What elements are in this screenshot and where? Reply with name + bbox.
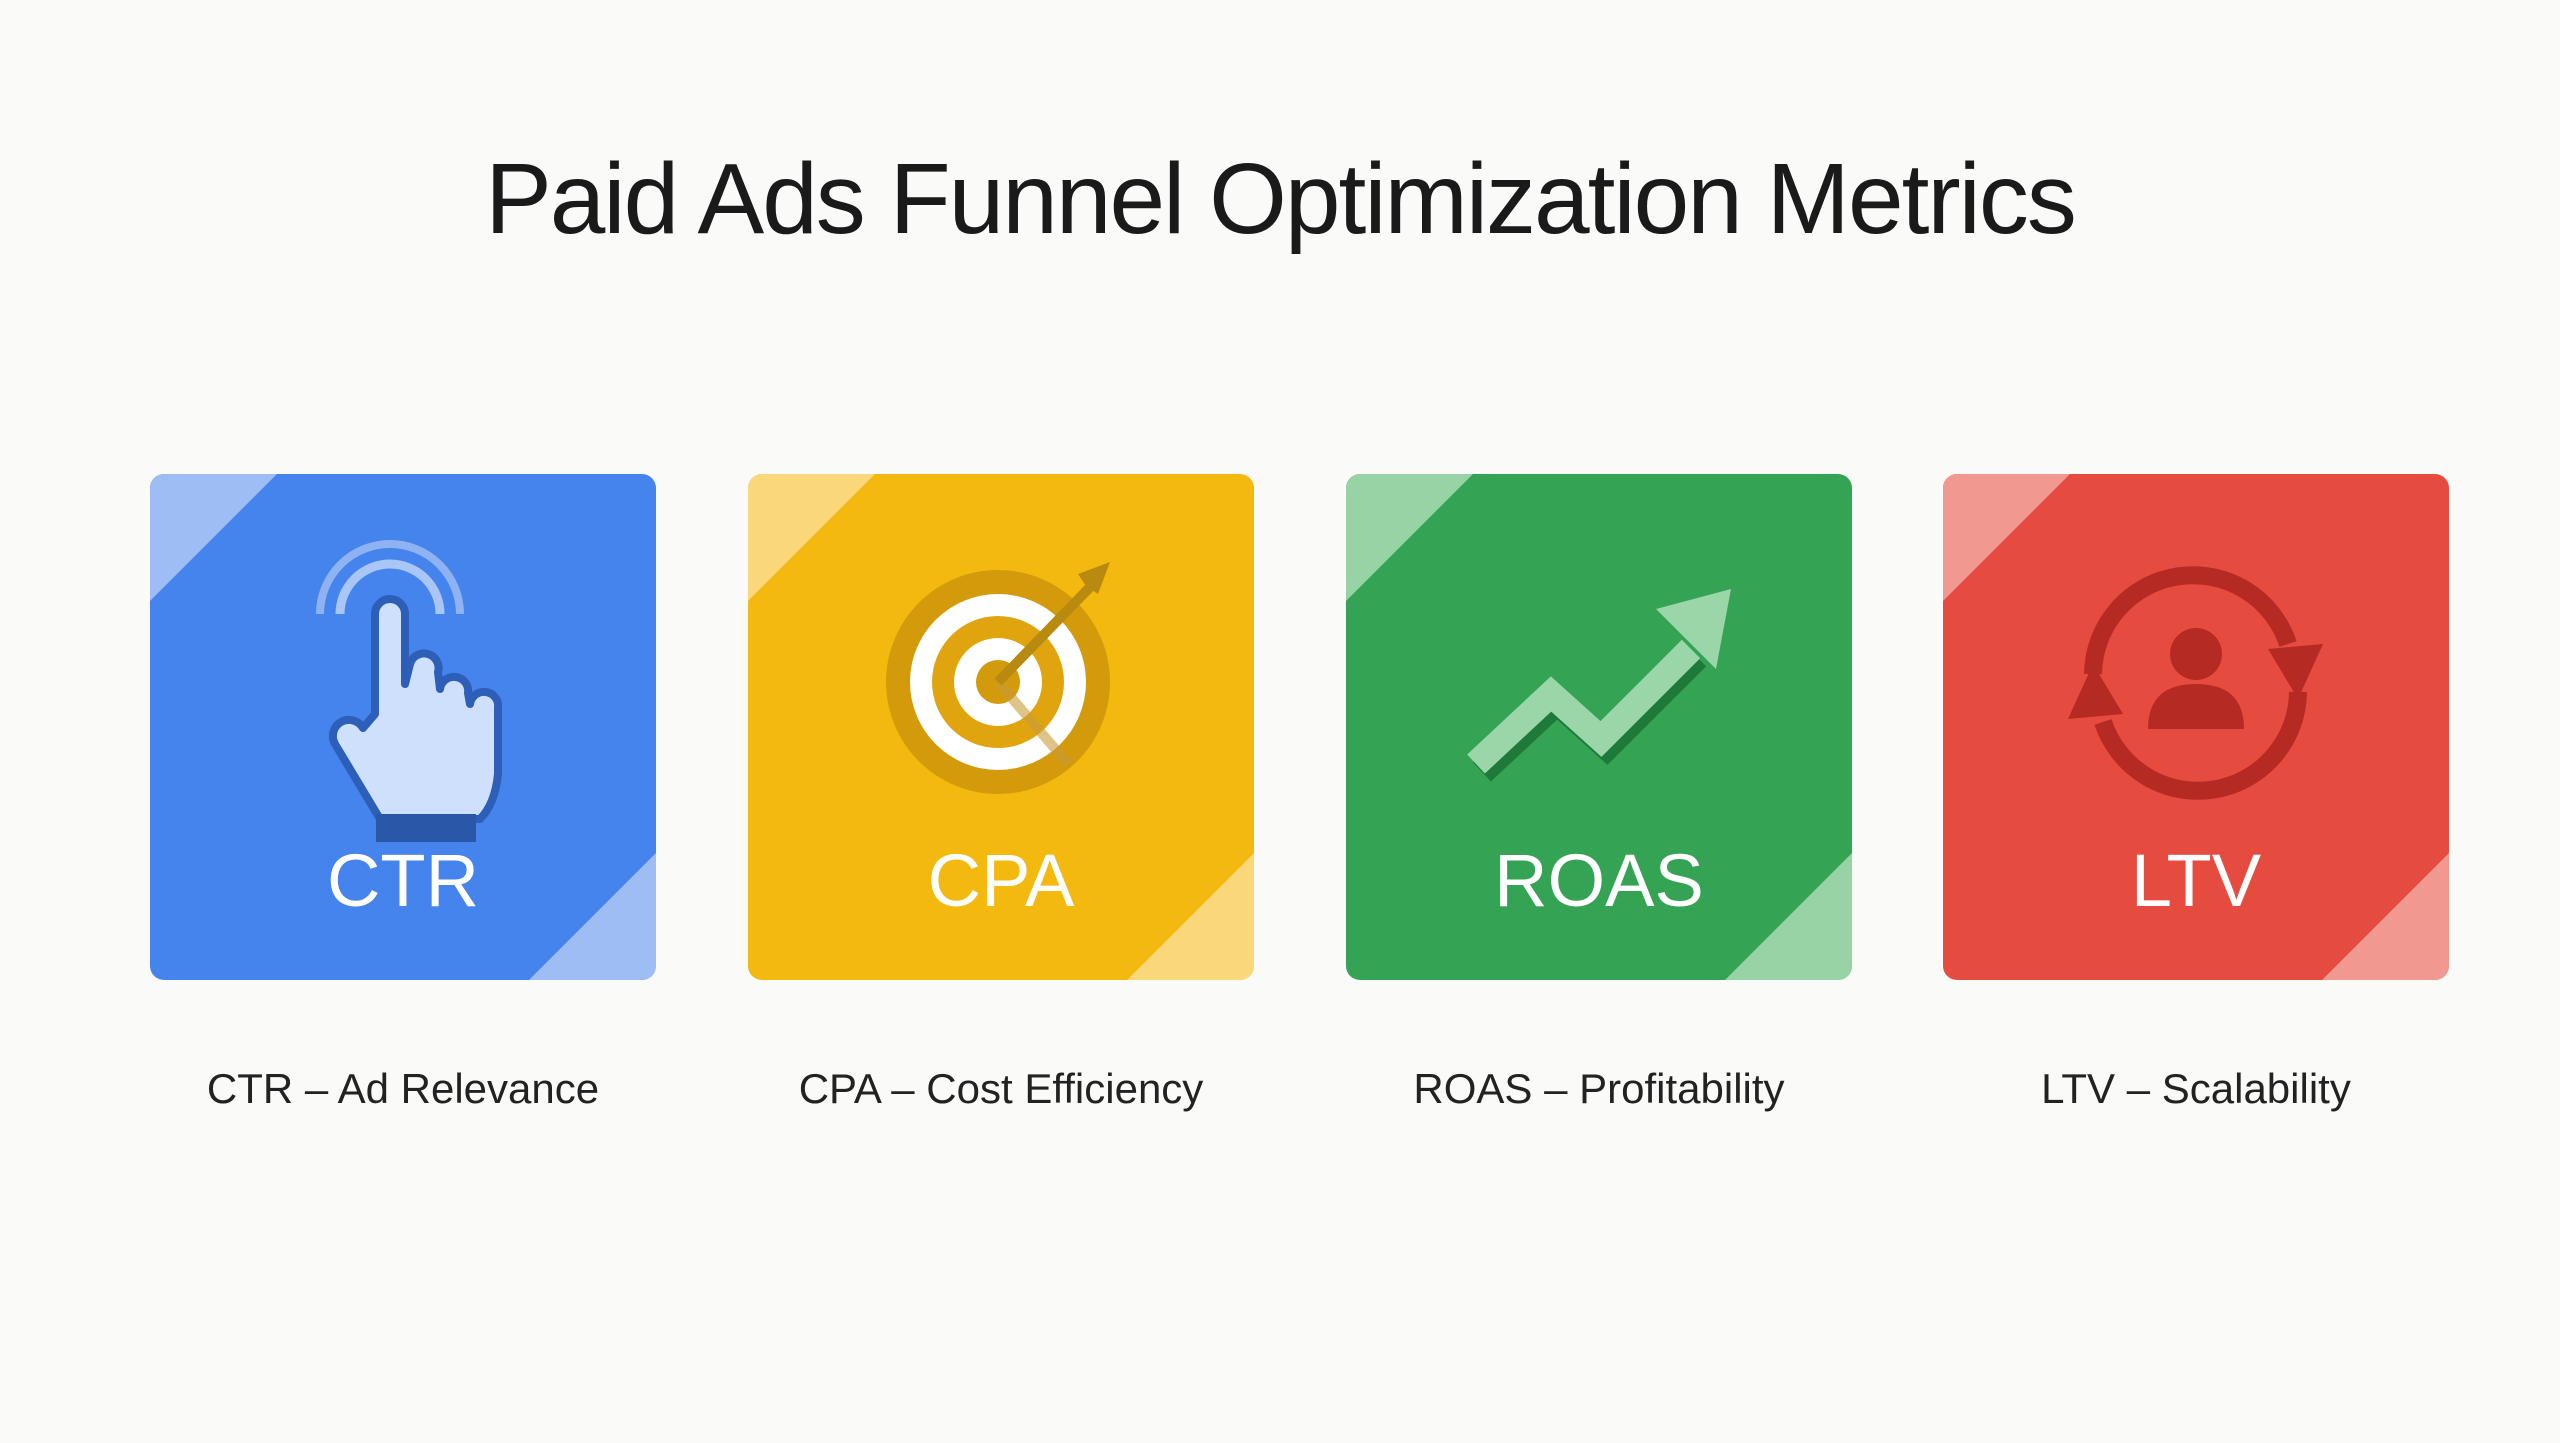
label: CPA: CPA [928, 839, 1075, 922]
title: Paid Ads Funnel Optimization Metrics [485, 143, 2075, 255]
card: CPA [748, 474, 1254, 980]
card: CTR [150, 474, 656, 980]
icon: user cycle [2068, 575, 2323, 791]
label: ROAS: ROAS [1494, 839, 1704, 922]
icon: target [886, 562, 1110, 794]
card: ROAS [1346, 474, 1852, 980]
label: LTV: LTV [2131, 839, 2262, 922]
caption: LTV: LTV – Scalability [2041, 1065, 2351, 1112]
caption: ROAS: ROAS – Profitability [1413, 1065, 1785, 1112]
icon: pointer hand [320, 544, 498, 842]
caption: CPA: CPA – Cost Efficiency [799, 1065, 1203, 1112]
label: CTR: CTR [327, 839, 479, 922]
caption: CTR: CTR – Ad Relevance [207, 1065, 599, 1112]
icon: trend arrow [1476, 589, 1731, 772]
card: LTV [1943, 474, 2449, 980]
